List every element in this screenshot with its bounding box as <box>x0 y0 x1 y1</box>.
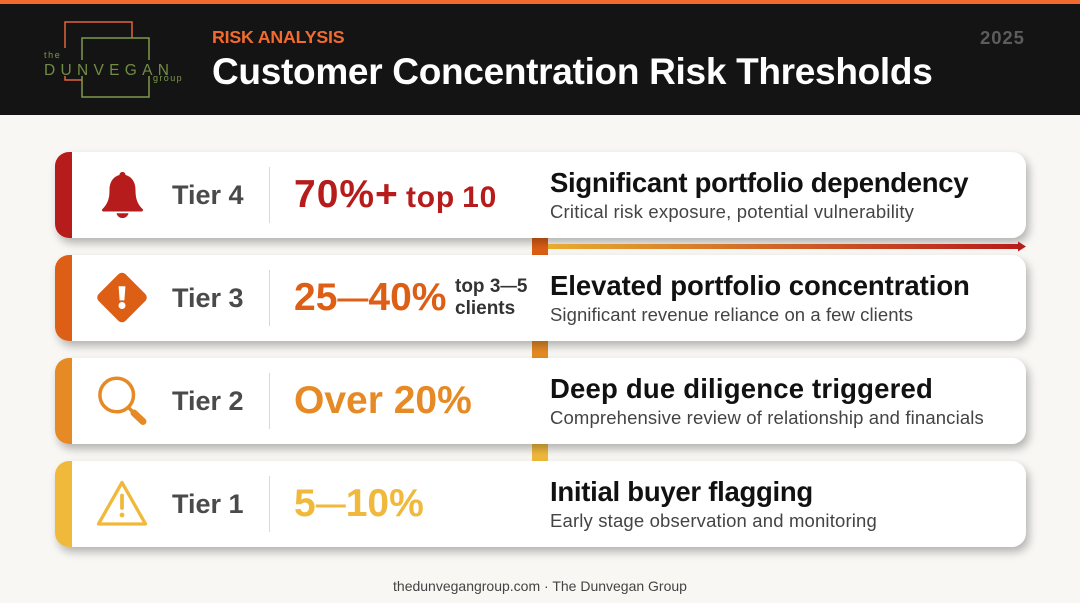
threshold qualifier: top 3—5 <box>455 276 527 297</box>
threshold qualifier: clients <box>455 298 515 319</box>
heading: Initial buyer flagging <box>550 476 813 507</box>
card: tier 3 <box>55 255 1026 341</box>
icon: bell <box>102 172 143 218</box>
eyebrow: RISK ANALYSIS <box>212 27 344 47</box>
arrow: escalating risk <box>548 242 1026 252</box>
logo: DUNVEGAN <box>44 62 174 79</box>
year: 2025 <box>980 27 1025 48</box>
logo <box>44 21 183 98</box>
threshold value: 70%+ top 10 <box>294 173 497 216</box>
card: tier 2 <box>55 358 1026 444</box>
icon: warning triangle <box>96 480 148 526</box>
description: Early stage observation and monitoring <box>550 510 877 531</box>
connector: tier 2 to 1 <box>532 444 548 462</box>
icon: warning diamond <box>97 272 147 322</box>
threshold value: 25—40% <box>294 276 446 319</box>
icon: magnifier <box>98 376 146 425</box>
connector: tier 4 to 3 <box>532 238 548 256</box>
threshold value: 5—10% <box>294 482 424 525</box>
card: tier 4 <box>55 152 1026 238</box>
tier label: Tier 4 <box>172 180 244 210</box>
tier label: Tier 2 <box>172 386 244 416</box>
description: Critical risk exposure, potential vulnerability <box>550 201 914 222</box>
threshold qualifier <box>455 276 527 319</box>
description: Comprehensive review of relationship and financials <box>550 407 984 428</box>
threshold value: Over 20% <box>294 379 472 422</box>
logo: the <box>44 50 61 60</box>
title: Customer Concentration Risk Thresholds <box>212 51 932 92</box>
footer: thedunvegangroup.com · The Dunvegan Group <box>393 578 687 594</box>
heading: Deep due diligence triggered <box>550 373 933 404</box>
connector: tier 3 to 2 <box>532 341 548 359</box>
heading: Elevated portfolio concentration <box>550 270 970 301</box>
logo: group <box>153 73 183 83</box>
header band <box>0 0 1080 115</box>
tier label: Tier 1 <box>172 489 244 519</box>
tier label: Tier 3 <box>172 283 244 313</box>
card: tier 1 <box>55 461 1026 547</box>
description: Significant revenue reliance on a few clients <box>550 304 913 325</box>
heading: Significant portfolio dependency <box>550 167 968 198</box>
